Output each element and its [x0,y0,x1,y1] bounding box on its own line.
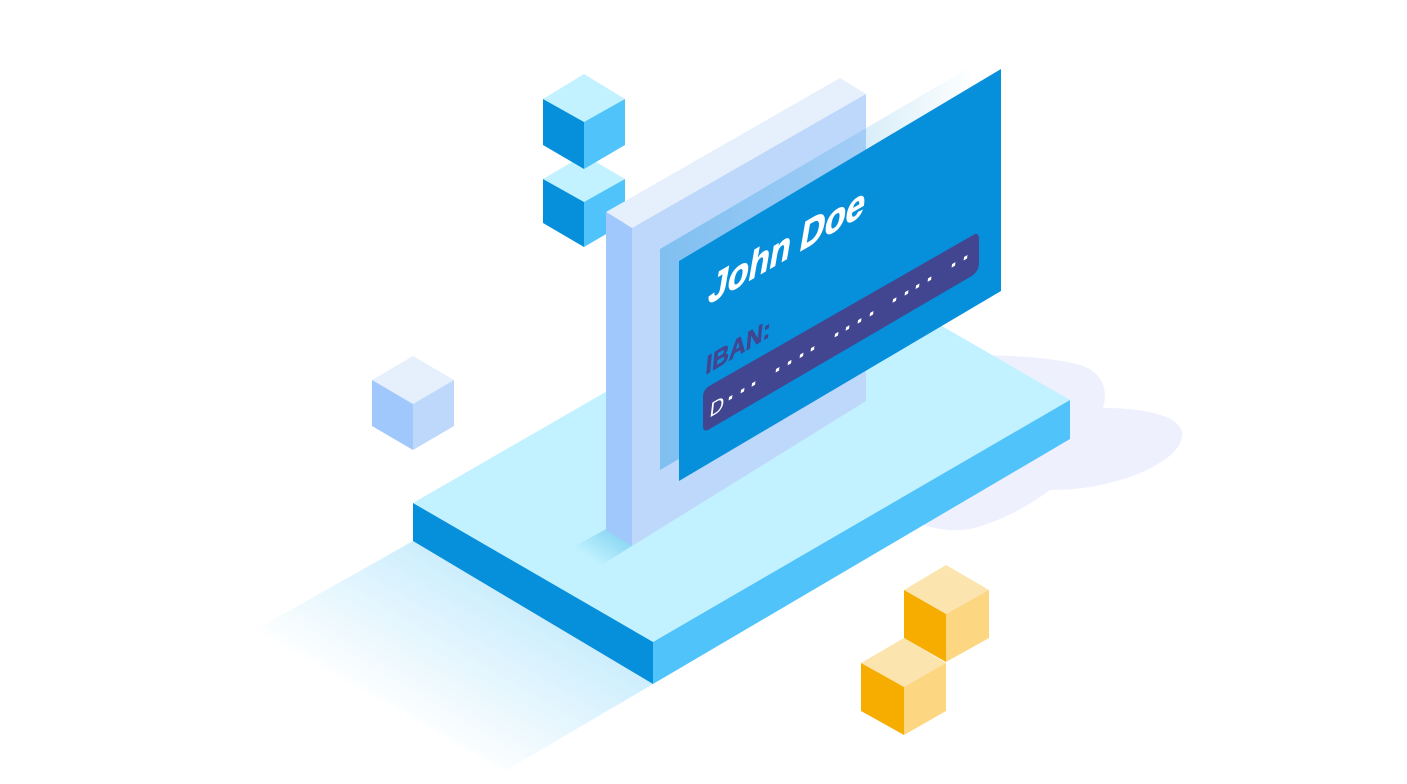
wall top [606,78,866,228]
wall side [606,212,632,546]
card shadow band [660,66,1001,470]
platform right side [653,400,1070,684]
platform top [413,262,1070,642]
light blue cube [372,356,454,450]
bank card [679,69,1001,481]
wall base reflection [572,529,632,566]
lower yellow cube [861,638,946,735]
floor shadow [255,541,653,771]
IBAN field [703,234,979,430]
upper yellow cube [904,565,989,662]
upper blue cube [543,74,625,169]
card name: John Doe [705,177,870,315]
IBAN label: IBAN: [704,313,772,381]
platform left side [413,503,653,684]
standing wall [606,78,866,546]
background cloud blob [900,355,1182,530]
IBAN dots: ................. [726,235,971,407]
platform [413,262,1070,684]
lower blue cube [543,155,625,247]
IBAN digits: D [708,391,726,423]
card face [679,69,1001,481]
wall front [632,94,866,546]
